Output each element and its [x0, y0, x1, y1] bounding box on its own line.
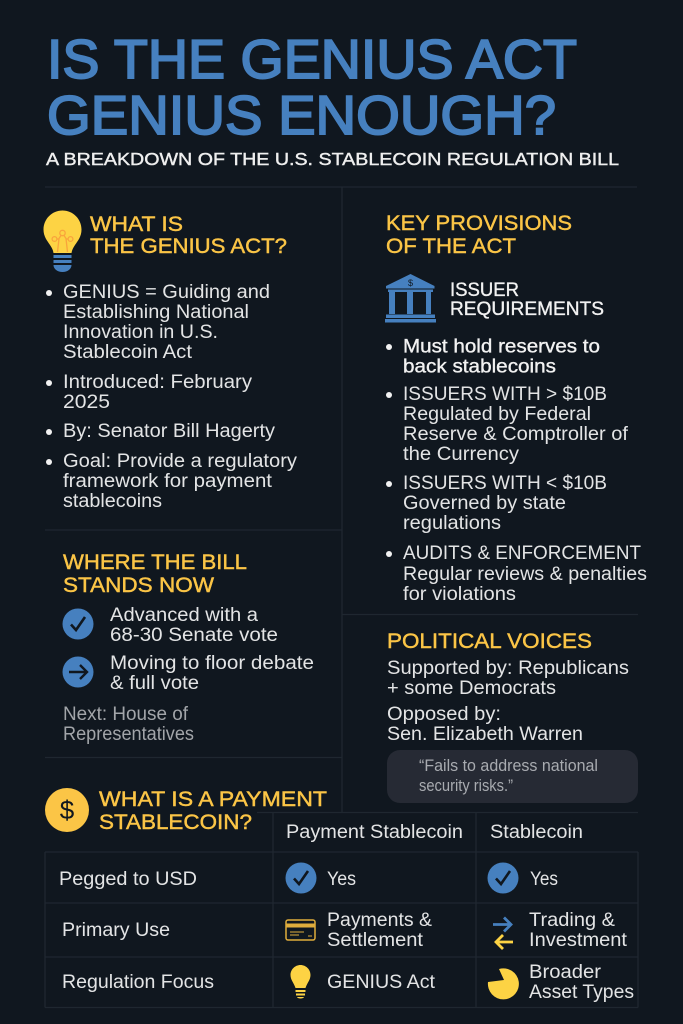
opponents: Sen. Elizabeth Warren: [387, 724, 583, 745]
row: pegged to USD: Yes: [327, 869, 356, 890]
row: primary use: [62, 910, 628, 951]
bullet list: Regular reviews & penalties: [403, 564, 647, 585]
bullet list: Governed by state: [403, 493, 566, 514]
panel: key provisions: [385, 211, 647, 605]
row: regulation focus: Broader: [529, 962, 602, 983]
icon: bank: [385, 274, 436, 322]
subtitle: A BREAKDOWN OF THE U.S. STABLECOIN REGULATION BILL: [46, 149, 619, 169]
table header: Payment Stablecoin: [286, 822, 463, 843]
supporters: Supported by: Republicans: [387, 658, 629, 679]
icon: dollar coin: [45, 788, 89, 832]
row: regulation focus: Asset Types: [529, 982, 634, 1003]
panel: where the bill stands now: [62, 550, 314, 745]
title: GENIUS ENOUGH?: [47, 84, 556, 146]
row: primary use: Payments &: [327, 910, 432, 931]
panel: what is a payment stablecoin: [45, 787, 634, 1003]
next step: Representatives: [63, 724, 194, 745]
supporters: + some Democrats: [387, 678, 556, 699]
bullet list: [386, 336, 647, 605]
bullet list: Stablecoin Act: [63, 342, 193, 363]
next step: Next: House of: [63, 704, 189, 725]
heading: [90, 212, 287, 258]
icon: arrow: [62, 656, 94, 688]
bullet list: back stablecoins: [403, 356, 556, 378]
table header: [286, 822, 583, 843]
bullet list: ISSUERS WITH > $10B: [403, 384, 607, 405]
bullet list: Goal: Provide a regulatory: [63, 451, 298, 472]
bullet list: Innovation in U.S.: [63, 322, 218, 343]
subheading: REQUIREMENTS: [450, 299, 604, 320]
subheading: ISSUER: [450, 280, 519, 301]
bullet list: Must hold reserves to: [403, 336, 600, 358]
bullet list: stablecoins: [63, 491, 162, 512]
bullet list: Regulated by Federal: [403, 404, 591, 425]
bullet list: Establishing National: [63, 302, 249, 323]
status: senate vote: Advanced with a: [110, 605, 258, 626]
bullet list: Reserve & Comptroller of: [403, 424, 629, 445]
heading: OF THE ACT: [386, 234, 516, 258]
bullet list: Introduced: February: [63, 372, 253, 393]
opponents: Opposed by:: [387, 704, 501, 725]
bullet list: [46, 282, 298, 512]
row: primary use: Investment: [529, 930, 628, 951]
heading: POLITICAL VOICES: [387, 629, 592, 653]
title: IS THE GENIUS ACT: [47, 28, 577, 90]
next step: [63, 704, 194, 745]
row: pegged to USD: Pegged to USD: [59, 869, 197, 890]
bullet list: for violations: [403, 584, 516, 605]
callout: quote: “Fails to address national: [419, 757, 598, 775]
bullet list: By: Senator Bill Hagerty: [63, 421, 276, 442]
heading: STABLECOIN?: [99, 810, 252, 834]
row: regulation focus: GENIUS Act: [327, 972, 436, 993]
bullet list: the Currency: [403, 444, 520, 465]
heading: STANDS NOW: [63, 573, 215, 597]
heading: WHAT IS: [90, 212, 183, 236]
row: regulation focus: [62, 962, 634, 1003]
heading: THE GENIUS ACT?: [90, 234, 287, 258]
bullet list: framework for payment: [63, 471, 273, 492]
opponents: [387, 704, 583, 745]
bullet list: GENIUS = Guiding and: [63, 282, 270, 303]
heading: WHERE THE BILL: [63, 550, 247, 574]
heading: [99, 787, 327, 834]
row: primary use: Primary Use: [62, 920, 170, 941]
status: senate vote: 68-30 Senate vote: [110, 625, 278, 646]
panel: political voices: [387, 629, 638, 803]
row: regulation focus: Regulation Focus: [62, 972, 214, 993]
bullet list: regulations: [403, 513, 501, 534]
callout: quote: security risks.”: [419, 777, 513, 795]
subheading: [450, 280, 604, 320]
icon: light bulb: [44, 210, 82, 272]
table header: Stablecoin: [490, 822, 583, 843]
heading: KEY PROVISIONS: [386, 211, 572, 235]
heading: WHAT IS A PAYMENT: [99, 787, 327, 811]
status: floor debate: [110, 653, 314, 694]
heading: [386, 211, 572, 258]
panel: what is the GENIUS Act: [44, 210, 298, 512]
icon: check: [62, 608, 94, 640]
title: [47, 28, 577, 146]
icon: bank: $: [408, 278, 413, 288]
status: senate vote: [110, 605, 278, 646]
row: primary use: Trading &: [529, 910, 615, 931]
bullet list: 2025: [63, 392, 110, 413]
comparison table: [59, 822, 634, 1003]
callout: quote: [387, 750, 638, 803]
supporters: [387, 658, 629, 699]
bullet list: AUDITS & ENFORCEMENT: [403, 543, 641, 564]
row: pegged to USD: [59, 862, 558, 894]
status: floor debate: & full vote: [110, 673, 199, 694]
row: primary use: Settlement: [327, 930, 424, 951]
icon: dollar coin: $: [60, 795, 75, 825]
bullet list: ISSUERS WITH < $10B: [403, 473, 607, 494]
row: pegged to USD: Yes: [530, 869, 558, 890]
heading: [63, 550, 247, 597]
status: floor debate: Moving to floor debate: [110, 653, 314, 674]
